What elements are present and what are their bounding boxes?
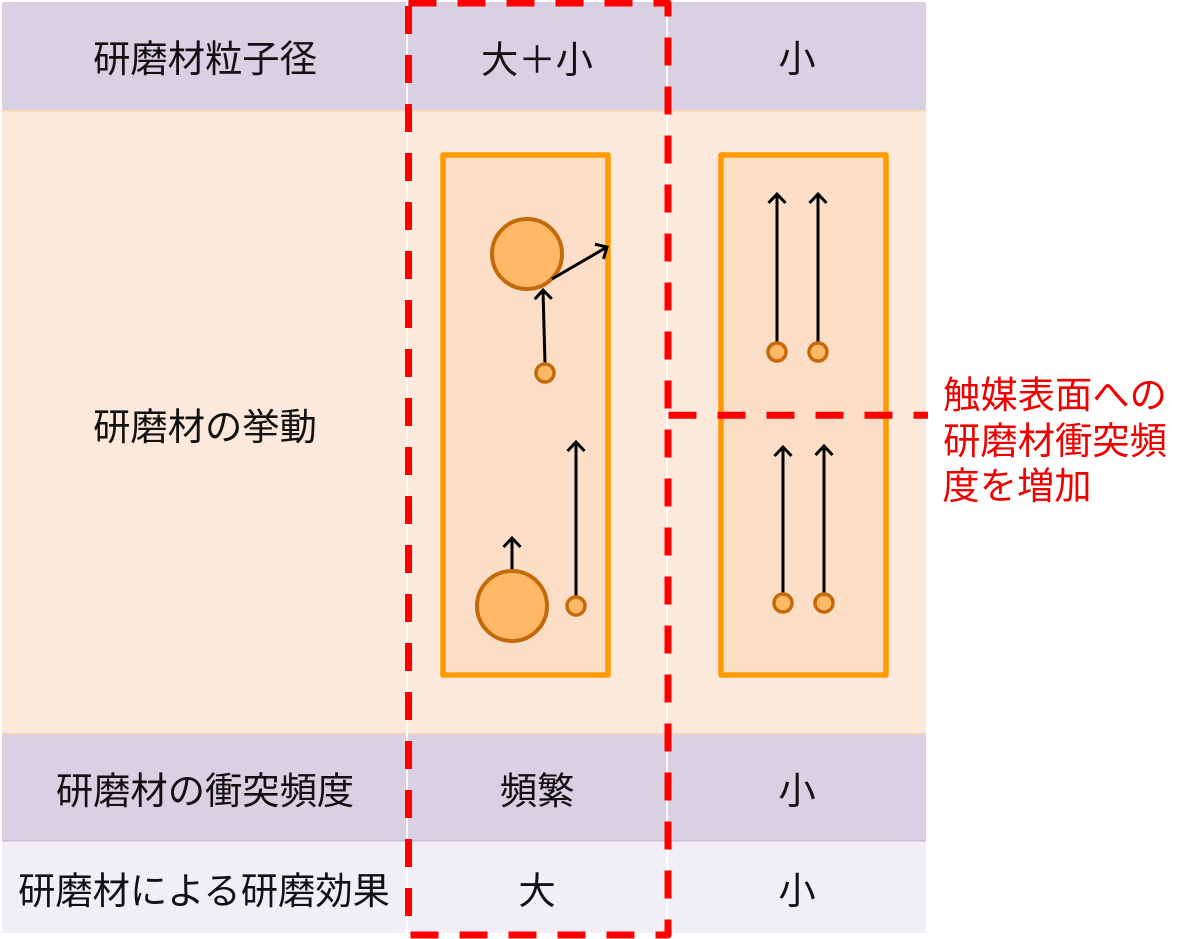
row label: abrasive behavior: 研磨材の挙動 — [93, 406, 317, 448]
callout: increased collision frequency — [942, 374, 1167, 507]
particle: lower large — [477, 571, 547, 641]
highlight: dashed red frame — [408, 3, 668, 935]
arrow: small upward to large — [543, 290, 545, 364]
callout: increased collision frequency: 度を増加 — [942, 465, 1092, 507]
cell: small: 小 — [778, 770, 816, 812]
arrow: lower long — [574, 442, 578, 597]
arrows: upper pair — [777, 194, 818, 343]
callout: increased collision frequency: 研磨材衝突頻 — [943, 420, 1167, 462]
cell: small: 小 — [778, 38, 816, 80]
arrows: lower pair — [783, 446, 824, 594]
arrow: lower short — [510, 538, 514, 572]
highlight: dashed red line — [668, 412, 928, 419]
panel: small particles — [721, 155, 886, 675]
callout: increased collision frequency: 触媒表面への — [943, 374, 1167, 416]
row label: collision frequency: 研磨材の衝突頻度 — [56, 770, 354, 812]
table background — [2, 2, 926, 933]
panel: large and small particles — [443, 155, 608, 675]
particles: lower pair — [774, 594, 833, 612]
cell: large: 大 — [518, 870, 556, 912]
row label: abrasive particle size: 研磨材粒子径 — [93, 38, 317, 80]
arrow: deflected — [552, 247, 607, 279]
cell: frequent: 頻繁 — [500, 770, 574, 812]
particle: upper large — [492, 219, 562, 289]
cell: large plus small: 大＋小 — [481, 39, 593, 81]
cell: small: 小 — [778, 870, 816, 912]
particles: upper pair — [768, 343, 827, 361]
particle: upper small — [536, 364, 554, 382]
particle: lower small — [567, 597, 585, 615]
row label: polishing effect: 研磨材による研磨効果 — [18, 870, 390, 912]
